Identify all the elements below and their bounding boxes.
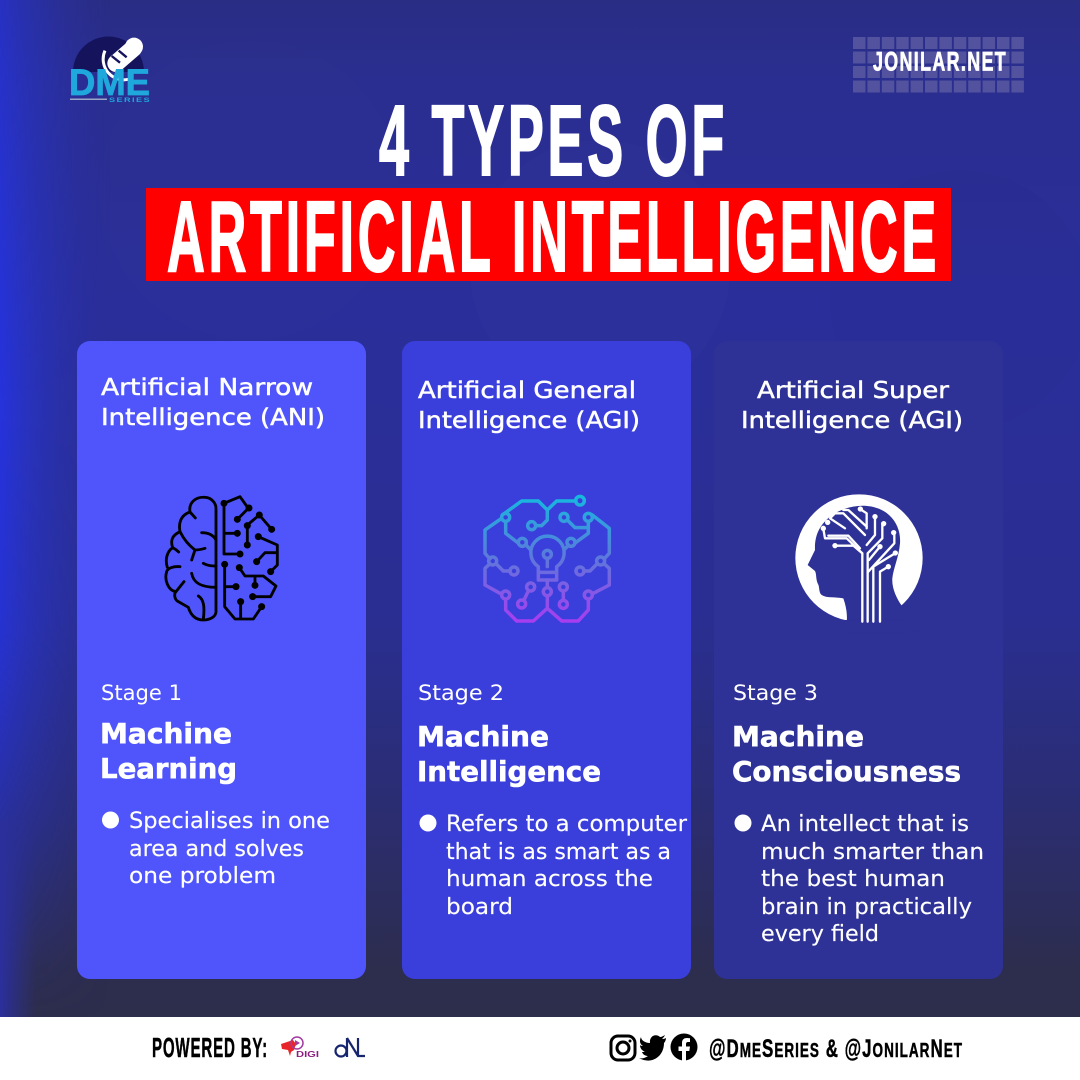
logo: DME Series: SERIES	[109, 97, 151, 104]
bullet text: Specialises in one	[129, 808, 330, 834]
heading: Super: Intelligence (AGI)	[741, 406, 963, 434]
bullet text: that is as smart as a	[446, 839, 671, 865]
subheading: Machine Consciousness: Machine	[732, 720, 864, 753]
icon: Digi partner logo: DIGI	[296, 1050, 319, 1059]
social handles: @DMESERIES & @JONILARNET	[709, 1035, 963, 1063]
icon: Twitter	[639, 1035, 666, 1061]
bullet text: Refers to a computer	[446, 811, 688, 837]
bullet text: brain in practically	[761, 894, 972, 920]
subheading: Machine Intelligence: Intelligence	[417, 755, 601, 788]
stage label: Stage 3	[733, 681, 818, 705]
heading: AGI	[418, 376, 640, 434]
bullet text: the best human	[761, 866, 945, 892]
subheading: Machine Intelligence: Machine	[417, 720, 549, 753]
heading: Super: Artificial Super	[757, 376, 949, 404]
heading: AGI: Intelligence (AGI)	[418, 406, 640, 434]
heading: Super	[741, 376, 963, 434]
panel: Artificial Super Intelligence	[714, 341, 1003, 979]
footer	[0, 1017, 1080, 1080]
powered by label: POWERED BY:	[152, 1032, 268, 1063]
logo: DME Series	[69, 37, 151, 104]
icon: AI head	[795, 494, 925, 633]
subheading: Machine Consciousness	[732, 720, 961, 788]
bullet text: much smarter than	[761, 839, 984, 865]
heading: ANI: Artificial Narrow	[101, 373, 313, 401]
subheading: Machine Learning	[100, 717, 237, 785]
icon: circuit lightbulb	[485, 496, 609, 621]
logo: Jonilar.net grid	[853, 37, 1024, 92]
bullet text: human across the	[446, 866, 653, 892]
logo: Jonilar.net grid: JONILAR.NET	[873, 46, 1007, 76]
bullet text: every field	[761, 921, 879, 947]
stage label: Stage 2	[418, 681, 504, 705]
heading: AGI: Artificial General	[418, 376, 636, 404]
logo: DME Series: DME	[69, 62, 150, 103]
subheading: Machine Learning: Machine	[100, 717, 232, 750]
bullet text	[102, 808, 330, 889]
heading: ANI	[101, 373, 325, 431]
bullet text	[734, 811, 984, 947]
title line 1: 4 TYPES OF	[379, 85, 728, 197]
icon: JN partner logo	[336, 1038, 365, 1057]
panel: Artificial Narrow Intelligence	[77, 341, 366, 979]
bullet text: An intellect that is	[761, 811, 969, 837]
panel: Artificial General Intelligence	[402, 341, 691, 979]
bullet text: one problem	[129, 863, 276, 889]
subheading: Machine Intelligence	[417, 720, 601, 788]
icon: Digi partner logo	[281, 1037, 319, 1059]
bullet text: board	[446, 894, 513, 920]
bullet text	[420, 811, 688, 920]
icon: circuit brain	[166, 497, 277, 620]
heading: ANI: Intelligence (ANI)	[101, 403, 325, 431]
subheading: Machine Consciousness: Consciousness	[732, 755, 961, 788]
icon: Facebook	[670, 1034, 698, 1061]
subheading: Machine Learning: Learning	[100, 752, 237, 785]
bullet text: area and solves	[129, 836, 304, 862]
stage label: Stage 1	[101, 681, 182, 705]
icon: Instagram	[611, 1036, 635, 1060]
